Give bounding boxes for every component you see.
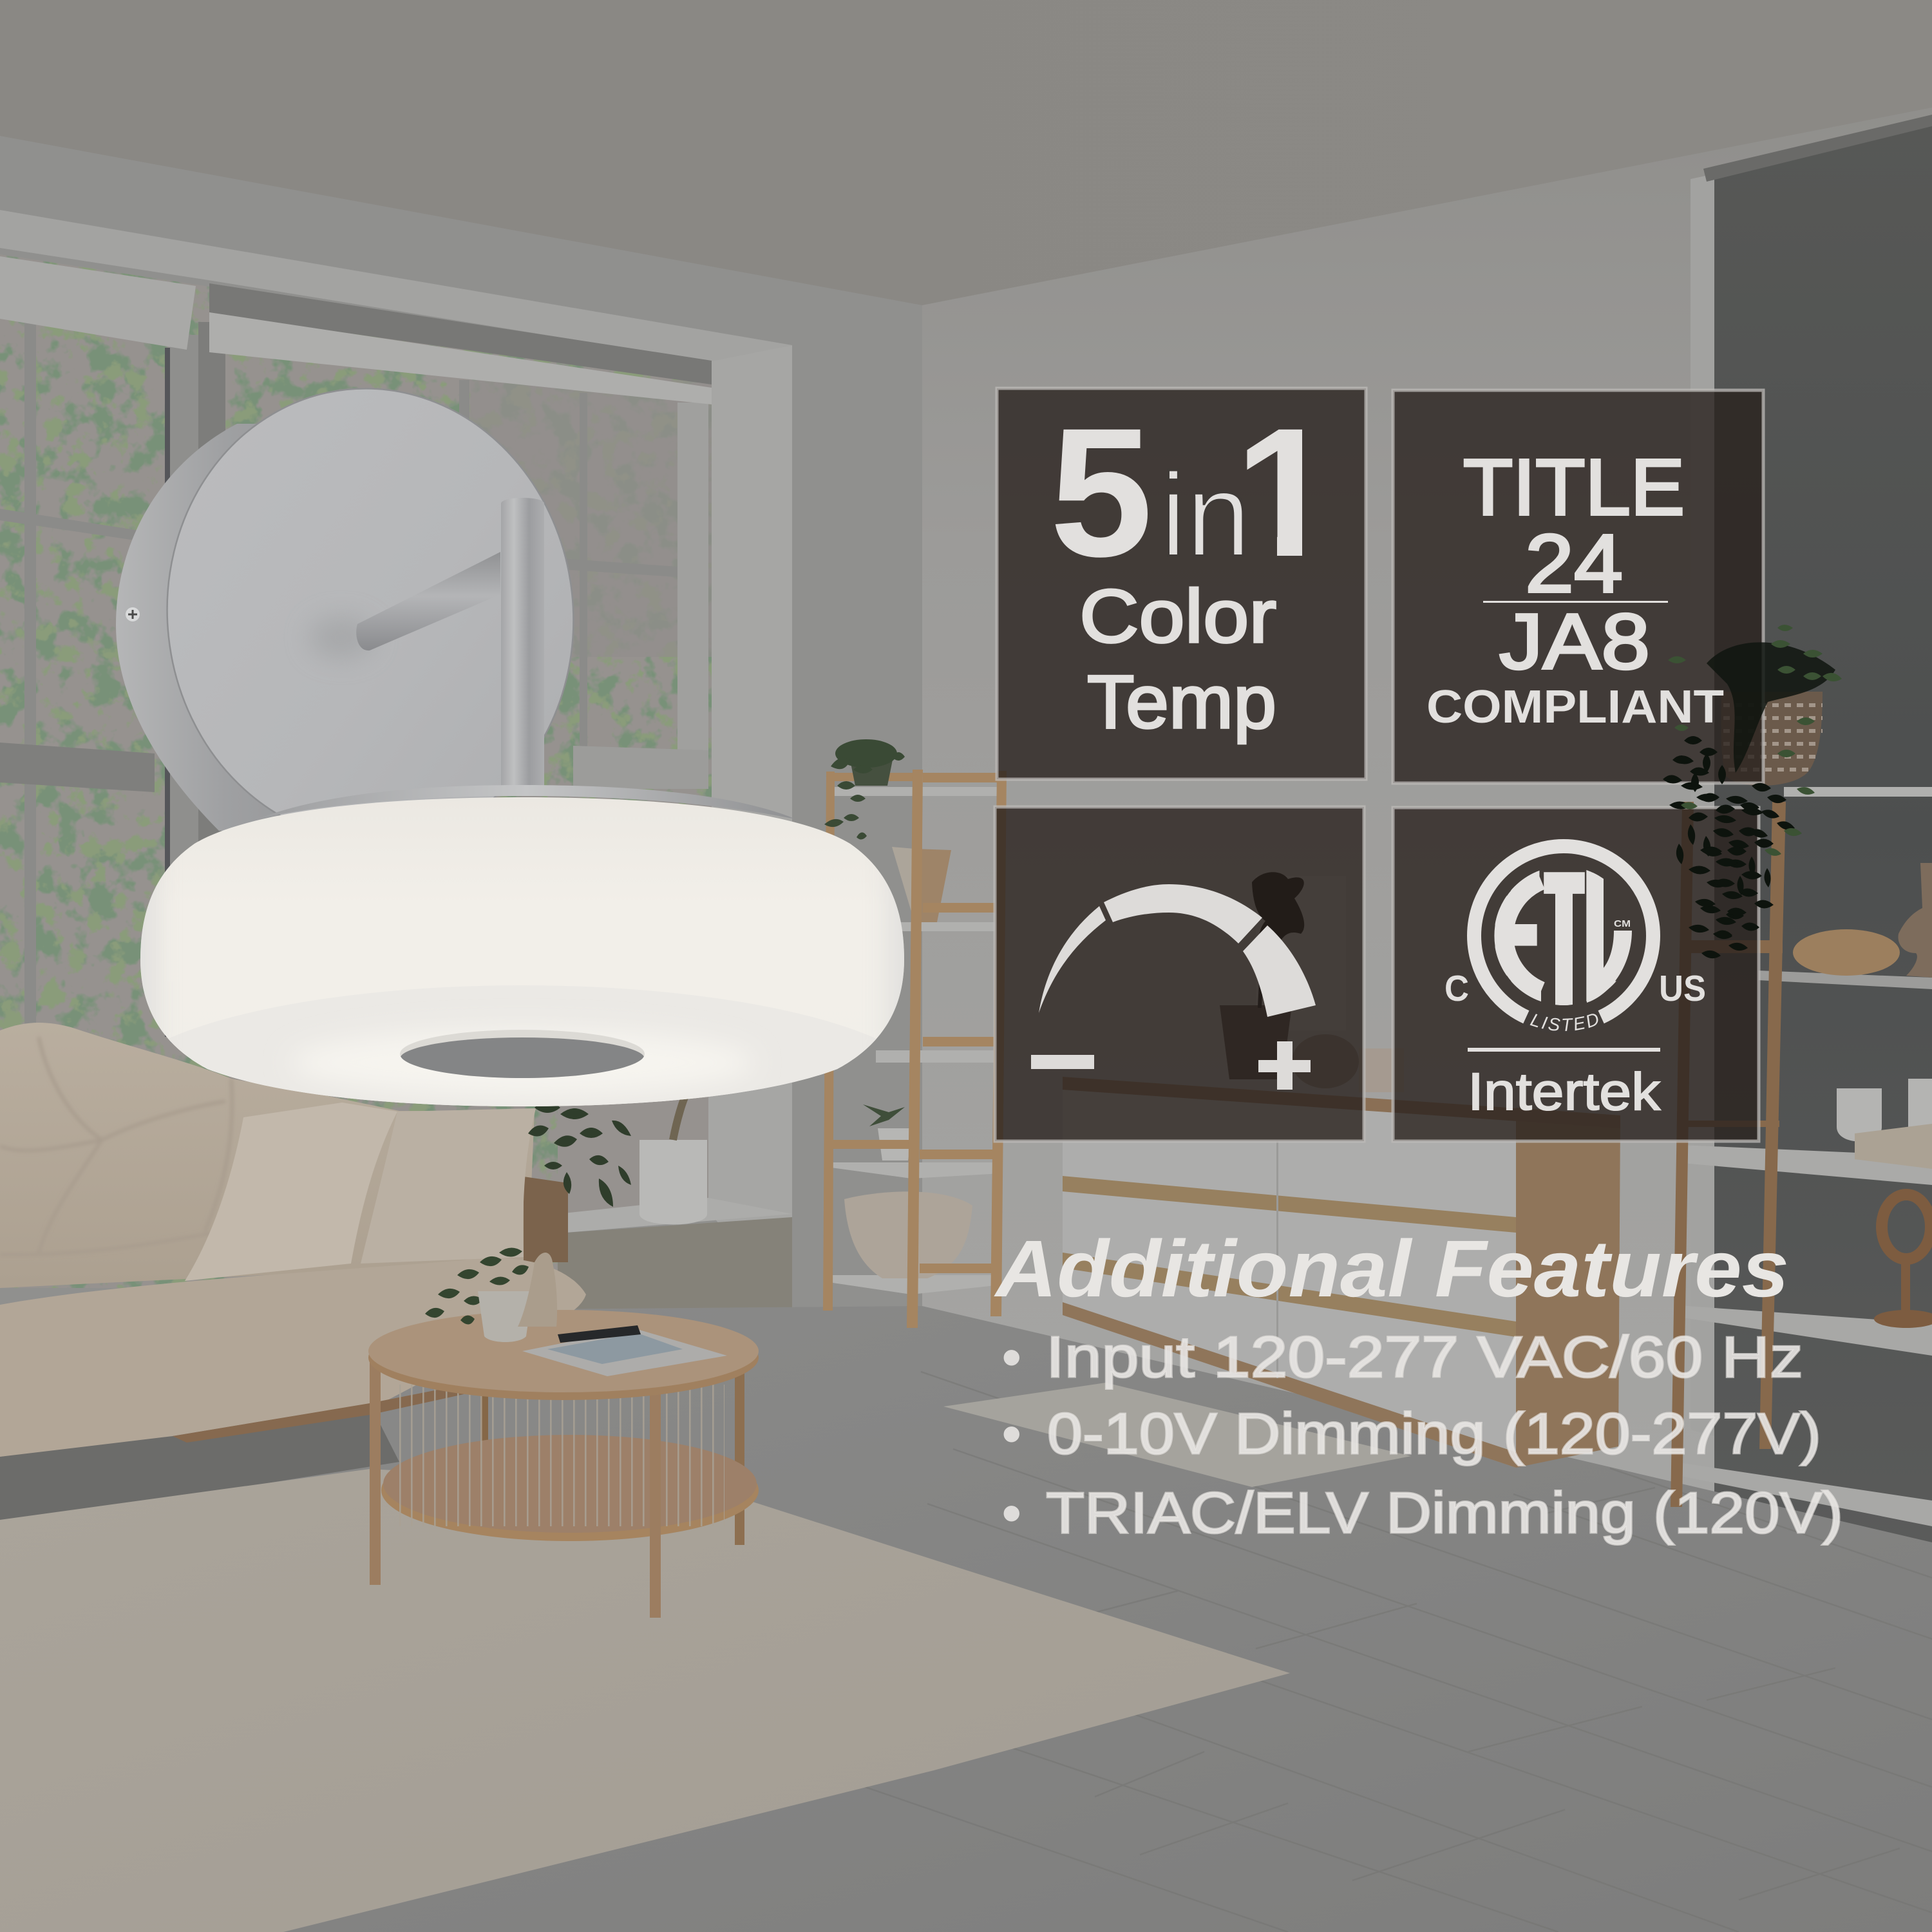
- potted plant on wall shelf: [824, 739, 905, 840]
- small runner rug: [943, 1383, 1411, 1487]
- large rug: [0, 1469, 1290, 1932]
- T and L strokes: [1555, 873, 1604, 1006]
- round mirror ornament: [1882, 1195, 1931, 1259]
- dark leaves, second layer: [1690, 748, 1795, 951]
- c mark: C: [1444, 968, 1469, 1009]
- white floor planter: [639, 1095, 707, 1225]
- floor: [0, 1306, 1932, 1932]
- US mark: US: [1659, 968, 1706, 1009]
- vertical stem: [501, 498, 544, 789]
- small planter on lower shelf: [863, 1104, 913, 1160]
- dark leaves: [1674, 736, 1779, 939]
- hanging plant leaves: [1663, 625, 1842, 958]
- bullet: 0-10V dimming: •: [1001, 1402, 1022, 1466]
- outer ring: [1474, 846, 1653, 1025]
- sofa wood base: [173, 1385, 464, 1443]
- sofa tuft folds: [0, 1037, 232, 1255]
- figurine: [518, 1253, 557, 1327]
- feature: TRIAC/ELV dimming: TRIAC/ELV Dimming (120V): [1046, 1481, 1843, 1546]
- number 24: 24: [1525, 518, 1623, 610]
- E crescent: [1504, 880, 1541, 991]
- JA8: JA8: [1499, 598, 1650, 685]
- dimming arc gauge: [1039, 884, 1316, 1017]
- CM mark: CM: [1614, 918, 1631, 929]
- COMPLIANT: COMPLIANT: [1426, 681, 1724, 733]
- left wall with window recess: [0, 136, 922, 1317]
- ETL logo: L: [1580, 827, 1635, 1044]
- right pillow: [361, 1108, 536, 1264]
- blind on right window: [1690, 115, 1932, 1546]
- window recess side: [708, 345, 792, 1314]
- ring gap behind LISTED: [1526, 1017, 1601, 1025]
- sofa: [0, 1023, 586, 1457]
- Color label: Color: [1079, 574, 1276, 658]
- lamp: wall sconce: [116, 388, 904, 1106]
- bullet: TRIAC/ELV dimming: •: [1001, 1481, 1022, 1546]
- ETL logo: [1444, 839, 1706, 1031]
- Temp label: Temp: [1087, 659, 1276, 744]
- LISTED arc text: [1528, 1024, 1600, 1031]
- green leaves: [1668, 625, 1842, 856]
- arm shadow: [309, 617, 374, 658]
- floor planks: [837, 1372, 1932, 1932]
- lamp back plate face: [145, 368, 596, 862]
- fiddle leaf plant and pot on dresser: [1220, 872, 1404, 1092]
- phone: [558, 1325, 641, 1343]
- tabletop plant and pot: [425, 1247, 529, 1325]
- dark leaves, third layer: [1663, 755, 1768, 958]
- silver ring on top of shade: [257, 785, 796, 819]
- sofa back cushion: [0, 1023, 535, 1288]
- glass shade: [140, 797, 904, 1106]
- magazine: [522, 1329, 727, 1376]
- panel: 5 in 1 color temp: [997, 388, 1366, 779]
- L crescent: [1587, 931, 1632, 1003]
- Intertek label: Intertek: [1468, 1063, 1661, 1121]
- sofa seat: [0, 1258, 586, 1457]
- panel: dimming gauge: [995, 807, 1364, 1141]
- books on shelf: [892, 847, 951, 922]
- window plant: [528, 1101, 631, 1207]
- woven basket: [844, 1191, 972, 1278]
- ceiling: [0, 0, 1932, 305]
- picture frame on dresser: [1256, 876, 1346, 1030]
- left pillow: [185, 1103, 397, 1281]
- numeral 5: 5: [1050, 390, 1153, 595]
- panel: Title 24 JA8 compliant: [1393, 390, 1763, 783]
- plus symbol: [1258, 1041, 1311, 1090]
- table wires: [396, 1385, 724, 1526]
- ETL logo: E: [1490, 827, 1544, 1044]
- center disc: [400, 1030, 645, 1080]
- right-hand ladder shelf: [1671, 787, 1932, 1526]
- word in: in: [1160, 448, 1251, 581]
- window frames: [0, 316, 708, 1043]
- rule under logo: [1468, 1048, 1660, 1052]
- dresser: [1063, 1077, 1620, 1468]
- ETL logo: LISTED: [1530, 1014, 1598, 1031]
- features heading: Additional Features: [994, 1224, 1789, 1314]
- shadow under sofa: [0, 1403, 399, 1526]
- minus symbol: [1031, 1055, 1094, 1069]
- ETL logo: T: [1543, 830, 1586, 1047]
- panel: ETL listed: [1391, 806, 1761, 1142]
- lamp back plate side edge: [116, 424, 335, 831]
- feature: 0-10V dimming: 0-10V Dimming (120-277V): [1047, 1402, 1821, 1466]
- woven bowl: [1793, 929, 1900, 976]
- divider line: [1483, 601, 1668, 603]
- wall shelf with bamboo posts: [823, 770, 1007, 1328]
- screw: [126, 607, 140, 621]
- window sill and wall below: [558, 1069, 792, 1323]
- numeral 1: 1: [1235, 390, 1337, 595]
- shade lower band and edge shading: [140, 887, 904, 1106]
- TITLE heading: TITLE: [1463, 444, 1685, 532]
- roller blinds on the window: [0, 256, 712, 404]
- sofa wood arm: [524, 1177, 568, 1262]
- feature: input voltage: Input 120-277 VAC/60 Hz: [1046, 1325, 1803, 1390]
- woven basket planter: [1721, 692, 1823, 786]
- horizontal arm: [356, 552, 500, 650]
- coffee table: [368, 1247, 759, 1618]
- bullet: input voltage: •: [1001, 1325, 1022, 1390]
- window recess soffit: [0, 210, 792, 362]
- dense foliage mass: [1707, 642, 1835, 773]
- vase: [1898, 863, 1932, 978]
- additional features: [994, 1224, 1843, 1546]
- white cups and books: [1837, 1079, 1932, 1141]
- window glass with trees: [0, 245, 715, 1301]
- right wall: [922, 108, 1932, 1558]
